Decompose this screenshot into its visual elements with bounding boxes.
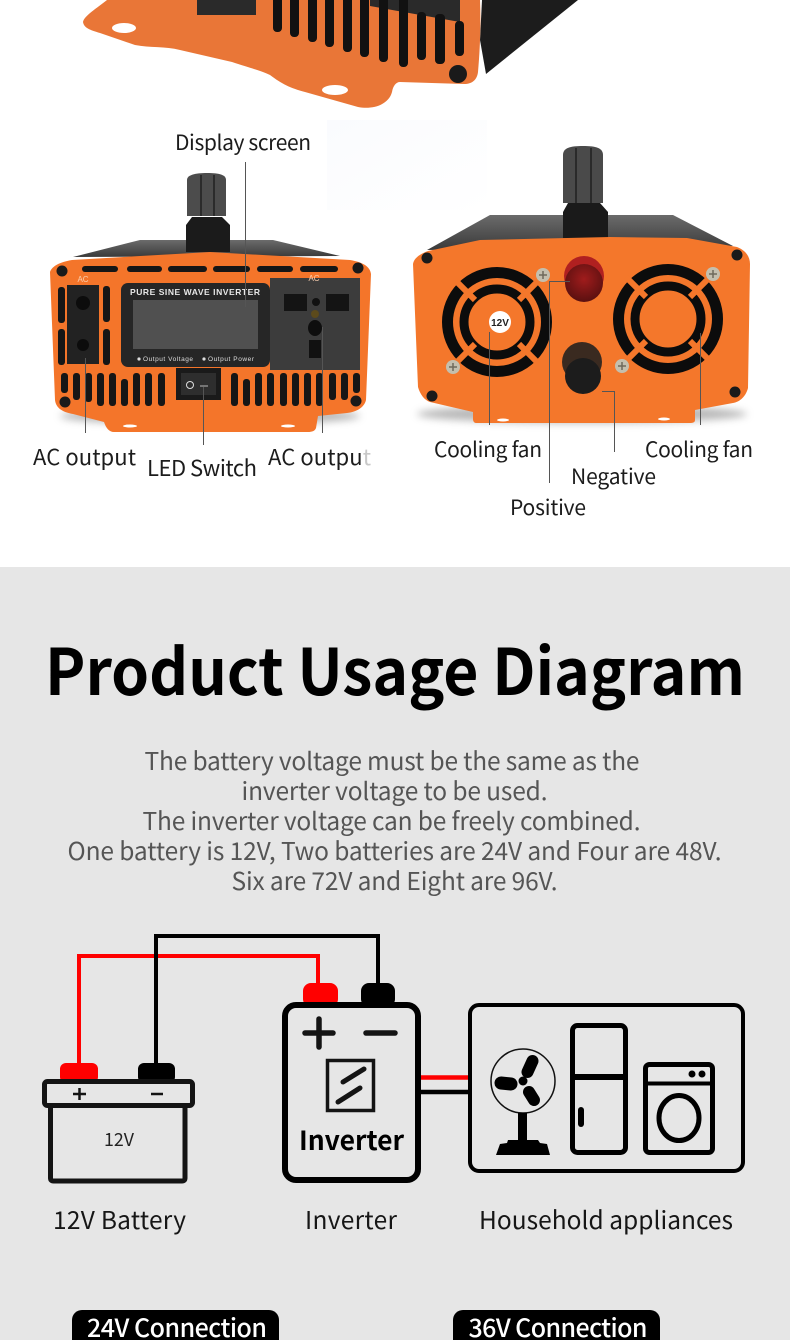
callout labels: Negative bbox=[571, 461, 656, 491]
handle bbox=[563, 146, 608, 238]
right cooling fan bbox=[618, 270, 718, 368]
icon: 12V battery bbox=[44, 1063, 192, 1181]
intro paragraph: inverter voltage to be used. bbox=[242, 773, 548, 808]
background: white product area bbox=[0, 0, 790, 567]
callout labels: AC output bbox=[268, 440, 371, 472]
screws bbox=[422, 250, 742, 402]
display panel bbox=[121, 283, 270, 367]
callout labels: Cooling fan bbox=[645, 434, 753, 464]
left cooling fan bbox=[448, 272, 546, 372]
intro paragraph: The inverter voltage can be freely combined. bbox=[142, 803, 640, 838]
diagram labels: Inverter bbox=[305, 1202, 397, 1237]
diagram labels bbox=[53, 1202, 733, 1237]
photo: cropped inverter bottom bbox=[83, 0, 578, 108]
panel: household appliances bbox=[470, 1005, 743, 1171]
left AC socket bbox=[67, 275, 99, 364]
top vents bbox=[58, 266, 338, 365]
intro paragraph bbox=[68, 743, 722, 898]
diagram labels: 12V Battery bbox=[53, 1202, 186, 1237]
icon: inverter: Inverter bbox=[299, 1119, 404, 1158]
callout labels: Cooling fan bbox=[434, 434, 542, 464]
bottom vents bbox=[61, 373, 360, 406]
diagram labels: Household appliances bbox=[479, 1202, 733, 1237]
photo: inverter rear view bbox=[413, 146, 750, 423]
12V sticker: 12V bbox=[491, 318, 509, 329]
icon: washing machine bbox=[646, 1064, 712, 1152]
right universal AC socket bbox=[270, 274, 360, 370]
display panel: PURE SINE WAVE INVERTER bbox=[130, 287, 260, 297]
handle knob bbox=[186, 173, 230, 252]
display panel: Output Voltage bbox=[143, 356, 193, 363]
intro paragraph: The battery voltage must be the same as the bbox=[144, 743, 640, 778]
intro paragraph: One battery is 12V, Two batteries are 24V and Four are 48V. bbox=[68, 833, 722, 868]
heading: Product Usage Diagram bbox=[45, 622, 745, 714]
red positive wire bbox=[79, 956, 318, 1064]
panel: usage diagram background bbox=[0, 567, 790, 1340]
left AC socket: AC bbox=[77, 275, 89, 284]
icon: 12V battery: 12V bbox=[104, 1126, 135, 1152]
icon: inverter bbox=[285, 983, 418, 1180]
red output wire bbox=[421, 1075, 469, 1080]
callout labels: Display screen bbox=[175, 127, 311, 157]
icon: fan bbox=[491, 1049, 555, 1155]
leader lines bbox=[86, 162, 700, 483]
positive terminal bbox=[564, 256, 604, 302]
black negative wire bbox=[156, 936, 378, 1064]
callout labels: LED Switch bbox=[147, 451, 257, 483]
photo: inverter front view bbox=[50, 173, 371, 432]
callout labels: AC output bbox=[33, 440, 136, 472]
rocker switch bbox=[176, 368, 221, 400]
negative terminal bbox=[562, 342, 602, 394]
black output wire bbox=[421, 1090, 469, 1094]
callout labels: Positive bbox=[510, 492, 586, 522]
faint photo edge tint bbox=[327, 120, 487, 210]
right universal AC socket: AC bbox=[308, 274, 320, 283]
intro paragraph: Six are 72V and Eight are 96V. bbox=[232, 863, 558, 898]
callout labels bbox=[33, 127, 753, 522]
screws bbox=[56, 262, 364, 408]
icon: fridge bbox=[572, 1026, 626, 1152]
display panel: Output Power bbox=[208, 356, 255, 363]
